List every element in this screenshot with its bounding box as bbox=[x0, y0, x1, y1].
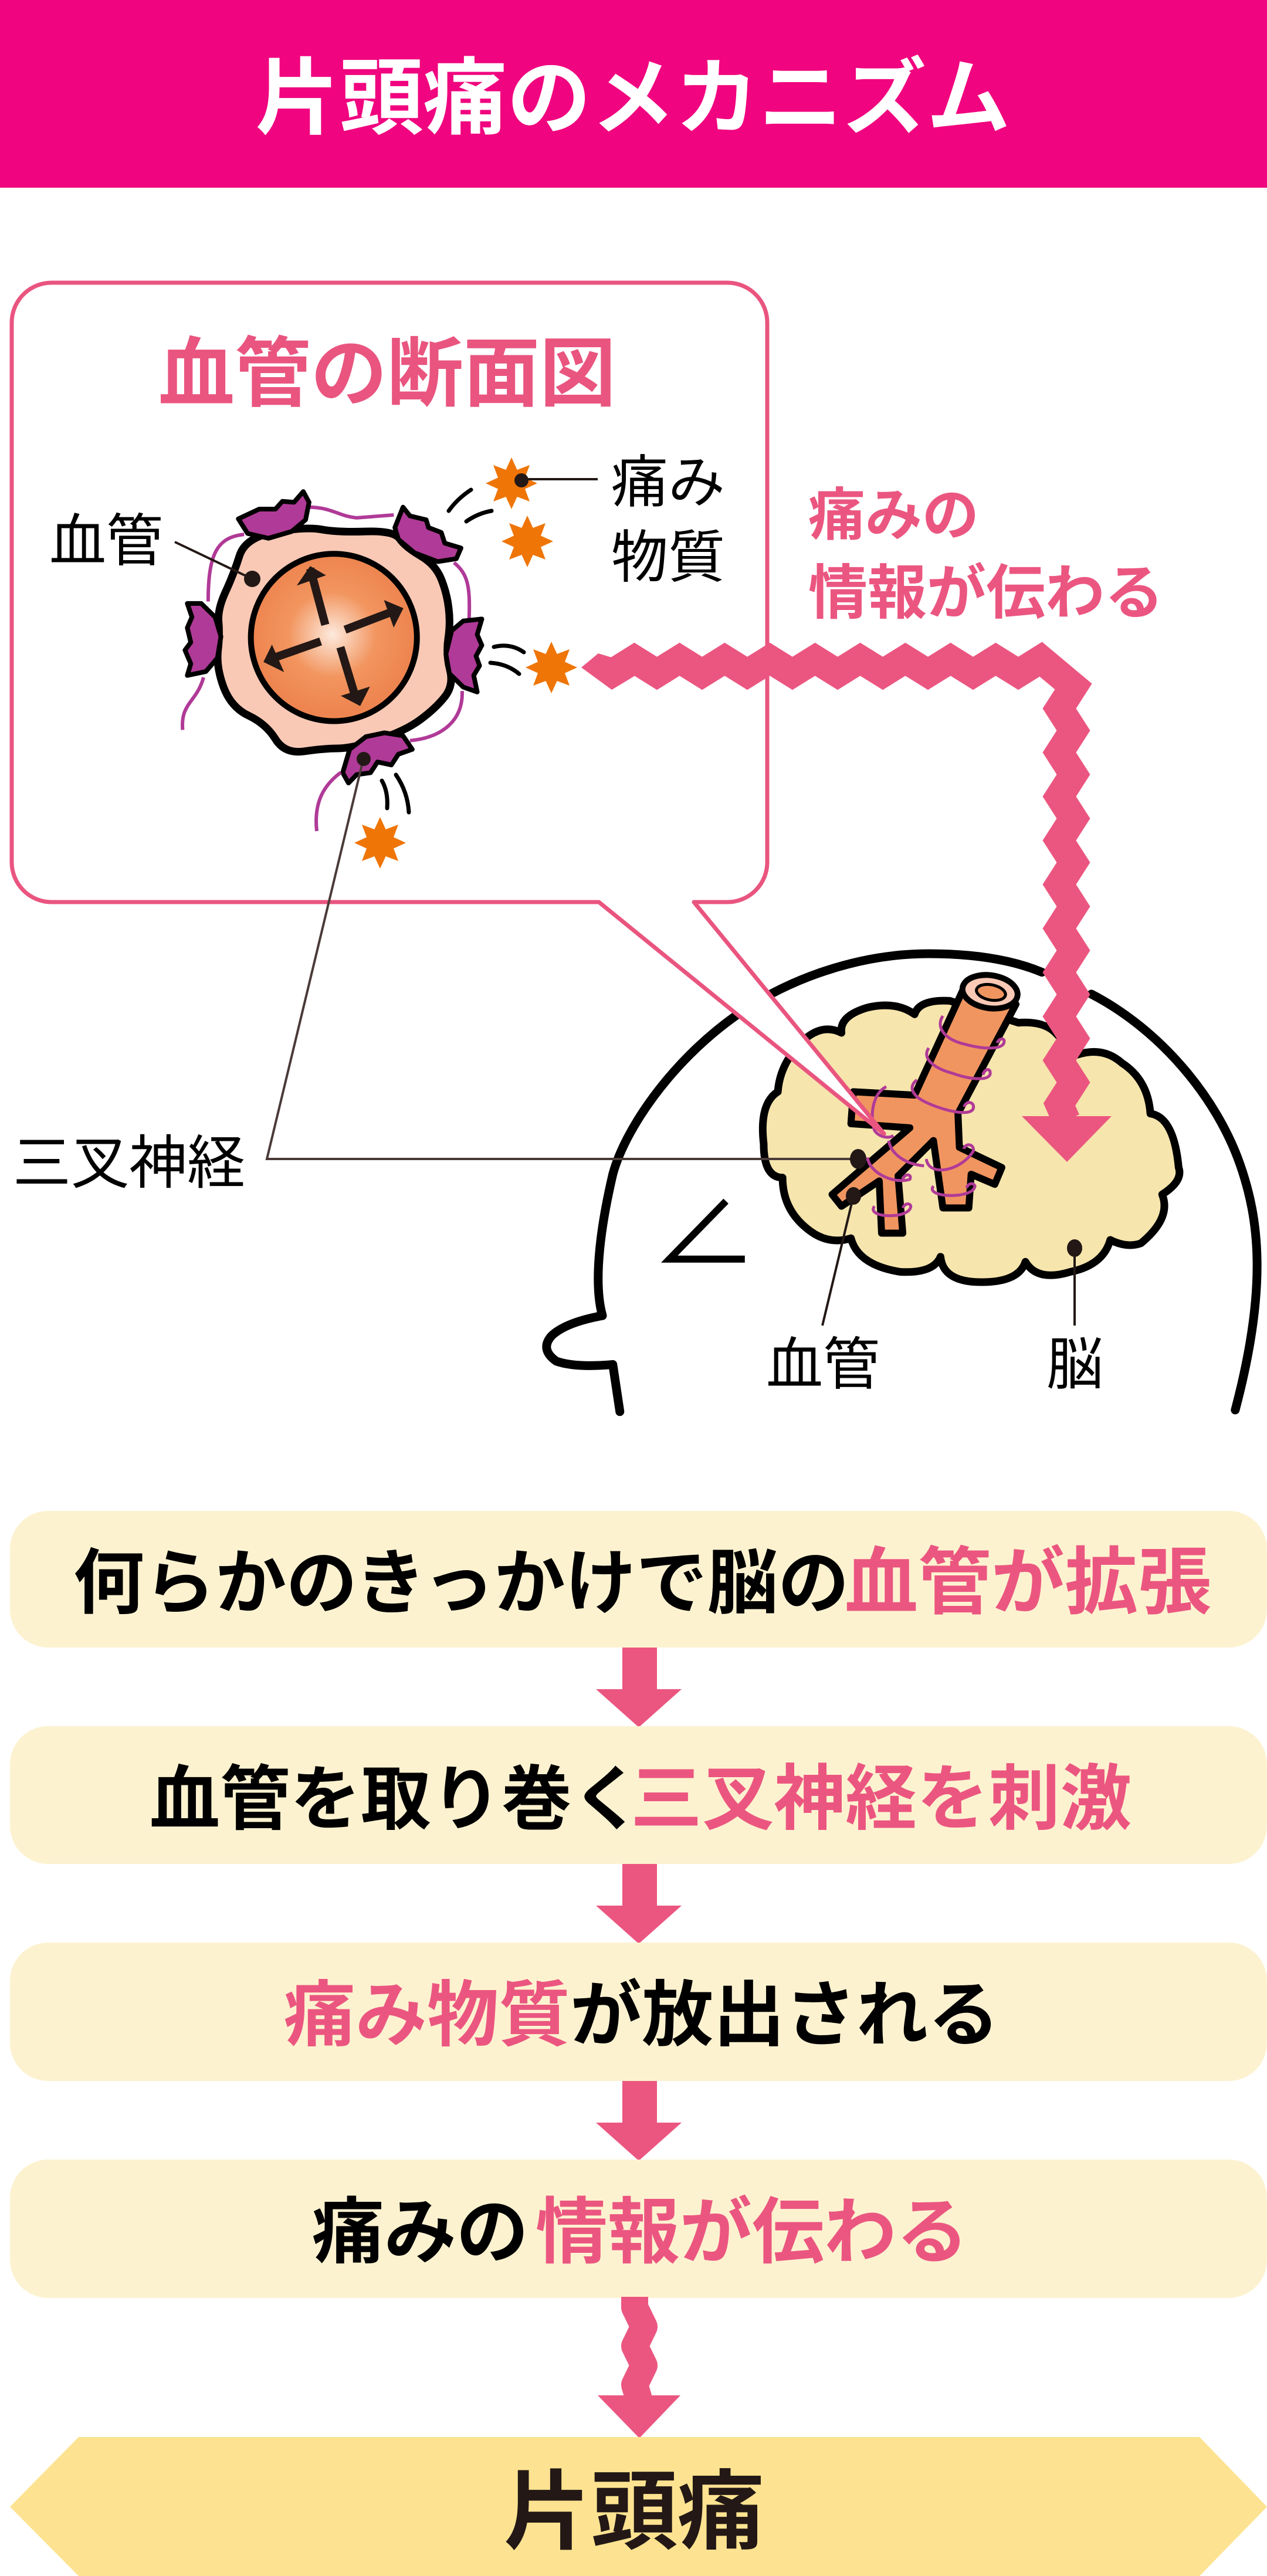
leader: brain bbox=[1067, 1239, 1082, 1326]
label: pain substance bbox=[611, 450, 725, 589]
thin nerve strand below the vessel bbox=[316, 772, 341, 831]
pain substance stars bbox=[354, 457, 577, 869]
label: pain substance: 物質 bbox=[611, 526, 725, 589]
step 3 bbox=[10, 1943, 1267, 2081]
callout heading: 血管の断面図 bbox=[158, 331, 616, 416]
callout panel: vessel cross-section bbox=[12, 283, 884, 1134]
title: 片頭痛のメカニズム bbox=[256, 52, 1010, 145]
step 2 bbox=[10, 1726, 1267, 1864]
step 4 bbox=[10, 2160, 1267, 2298]
step 3: 痛み物質が放出される bbox=[284, 1975, 1000, 2055]
label: brain: 脳 bbox=[1046, 1333, 1103, 1397]
leader: pain substance bbox=[514, 473, 598, 487]
step 1 bbox=[10, 1511, 1267, 1648]
illustration: head outline bbox=[547, 954, 1257, 1412]
header banner bbox=[0, 0, 1267, 188]
diagram: vessel cross-section bbox=[182, 492, 482, 783]
step 4: 痛みの bbox=[312, 2192, 529, 2273]
result banner: migraine bbox=[10, 2437, 1267, 2576]
result banner: migraine: 片頭痛 bbox=[504, 2464, 764, 2561]
leader: blood vessel in brain bbox=[822, 1187, 861, 1326]
label: trigeminal nerve: 三叉神経 bbox=[13, 1130, 245, 1195]
illustration: brain bbox=[763, 1001, 1180, 1282]
arrow 3 bbox=[596, 2081, 682, 2161]
label: pain information travels bbox=[808, 483, 1164, 626]
illustration: face mark bbox=[669, 1201, 745, 1259]
step 1: 血管が拡張 bbox=[845, 1542, 1211, 1623]
motion lines bbox=[382, 490, 524, 812]
label: pain information travels: 情報が伝わる bbox=[808, 561, 1164, 626]
illustration: blood vessel tree with trigeminal coils bbox=[832, 969, 1025, 1233]
label: blood vessel: 血管 bbox=[49, 509, 163, 573]
leader: trigeminal nerve bbox=[267, 752, 866, 1169]
label: pain substance: 痛み bbox=[611, 450, 725, 514]
step 2: 血管を取り巻く bbox=[150, 1760, 642, 1839]
leader: blood vessel in cross-section bbox=[175, 542, 260, 587]
wavy arrow 4 bbox=[598, 2297, 680, 2438]
step 1: 何らかのきっかけで脳の bbox=[73, 1543, 849, 1623]
step 4: 情報が伝わる bbox=[536, 2192, 968, 2273]
label: pain information travels: 痛みの bbox=[808, 483, 979, 547]
arrow 1 bbox=[596, 1648, 682, 1727]
pain signal zigzag arrow bbox=[581, 643, 1112, 1162]
label: blood vessel lower: 血管 bbox=[766, 1333, 880, 1397]
step 2: 三叉神経を刺激 bbox=[631, 1759, 1132, 1839]
arrow 2 bbox=[596, 1864, 682, 1944]
